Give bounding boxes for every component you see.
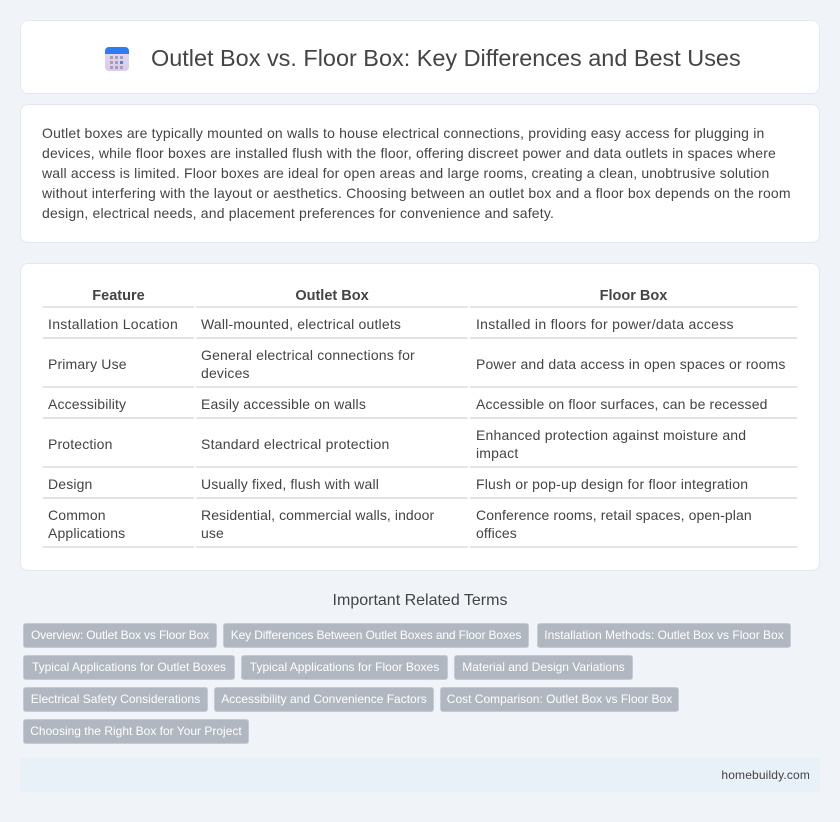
comparison table panel	[20, 263, 820, 571]
related term tags: Cost Comparison: Outlet Box vs Floor Box	[447, 692, 672, 706]
row: common applications: offices	[476, 525, 517, 541]
row: common applications	[43, 507, 797, 548]
footer source: homebuildy.com	[721, 768, 810, 782]
row: accessibility: Accessible on floor surfaces, can be recessed	[476, 396, 768, 412]
row: common applications: use	[201, 525, 224, 541]
row: installation location: Installed in floors for power/data access	[476, 316, 734, 332]
table	[43, 288, 797, 548]
intro text panel	[20, 104, 820, 243]
row: primary use: Primary Use	[48, 356, 127, 372]
row: protection: impact	[476, 445, 518, 461]
related term tags: Installation Methods: Outlet Box vs Floor Box	[544, 628, 784, 642]
intro paragraph: Outlet boxes are typically mounted on walls to house electrical connections, providing easy access for plugging in	[42, 125, 764, 141]
table header: Outlet Box	[295, 288, 369, 304]
table header	[43, 288, 797, 308]
row: installation location	[43, 316, 797, 339]
related term tags: Key Differences Between Outlet Boxes and Floor Boxes	[231, 628, 521, 642]
title: Outlet Box vs. Floor Box: Key Differences and Best Uses	[151, 45, 741, 71]
related term tags: Accessibility and Convenience Factors	[221, 692, 427, 706]
row: installation location: Installation Location	[48, 316, 178, 332]
row: design: Flush or pop-up design for floor integration	[476, 476, 748, 492]
table header: Floor Box	[600, 288, 667, 304]
row: protection	[43, 427, 797, 468]
row: installation location: Wall-mounted, electrical outlets	[201, 316, 401, 332]
related term tags: Typical Applications for Outlet Boxes	[32, 660, 226, 674]
row: common applications: Common	[48, 507, 106, 523]
row: primary use	[43, 347, 797, 388]
intro paragraph: without interfering with the layout or aesthetics. Choosing between an outlet box and a floor box depends on the room	[42, 185, 791, 201]
row: accessibility: Easily accessible on walls	[201, 396, 366, 412]
icon: calendar	[105, 47, 129, 71]
row: design	[43, 476, 797, 499]
row: primary use: General electrical connections for	[201, 347, 415, 363]
row: design: Usually fixed, flush with wall	[201, 476, 379, 492]
footer bar	[20, 758, 820, 792]
related term tags: Choosing the Right Box for Your Project	[30, 724, 242, 738]
row: design: Design	[48, 476, 92, 492]
intro paragraph: design, electrical needs, and placement preferences for convenience and safety.	[42, 205, 554, 221]
intro paragraph: wall access is limited. Floor boxes are ideal for open areas and large rooms, creating a clean, unobtrusive solution	[42, 165, 769, 181]
related term tags: Electrical Safety Considerations	[31, 692, 200, 706]
related term tags: Typical Applications for Floor Boxes	[250, 660, 439, 674]
row: accessibility: Accessibility	[48, 396, 126, 412]
related term tags: Overview: Outlet Box vs Floor Box	[31, 628, 209, 642]
row: accessibility	[43, 396, 797, 419]
row: primary use: devices	[201, 365, 250, 381]
row: common applications: Residential, commercial walls, indoor	[201, 507, 434, 523]
row: common applications: Applications	[48, 525, 125, 541]
row: protection: Protection	[48, 436, 113, 452]
table header: Feature	[92, 288, 145, 304]
row: protection: Standard electrical protection	[201, 436, 390, 452]
intro paragraph	[42, 125, 791, 221]
row: protection: Enhanced protection against moisture and	[476, 427, 746, 443]
row: common applications: Conference rooms, retail spaces, open-plan	[476, 507, 752, 523]
row: primary use: Power and data access in open spaces or rooms	[476, 356, 785, 372]
related terms heading: Important Related Terms	[333, 592, 507, 609]
related term tags	[23, 623, 791, 744]
header panel	[20, 20, 820, 94]
related term tags: Material and Design Variations	[462, 660, 625, 674]
intro paragraph: devices, while floor boxes are installed flush with the floor, offering discreet power and data outlets in spaces where	[42, 145, 776, 161]
